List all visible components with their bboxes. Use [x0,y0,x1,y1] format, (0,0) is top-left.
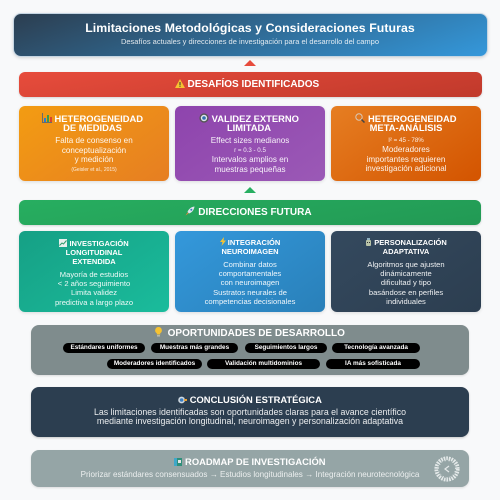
text: conceptualización [62,146,126,155]
text: Effect sizes medianos [211,136,289,145]
tags: IA más sofisticada [345,360,401,367]
heading [59,238,129,266]
heading: DE MEDIDAS [63,122,122,133]
heading: INVESTIGACIÓN [69,238,129,248]
text: competencias decisionales [205,297,295,306]
tags: Moderadores identificados [114,360,195,367]
tags: Seguimientos largos [255,344,317,351]
heading [199,113,299,133]
text [55,270,133,307]
heading: HETEROGENEIDAD [55,113,143,124]
heading [220,237,280,256]
panel: validez externo limitada: Intervalos amplios en [212,155,288,164]
text: dificultad y tipo [381,278,431,287]
heading [42,113,143,133]
text [367,260,445,306]
panel: heterogeneidad meta-análisis: Moderadores [382,145,430,154]
text: Las limitaciones identificadas son oportunidades claras para el avance científico [94,407,406,417]
panel: integración neuroimagen [175,231,325,312]
panel: investigación longitudinal extendida [19,231,169,312]
text: Sustratos neurales de [213,288,287,297]
heading: NEUROIMAGEN [221,247,279,256]
panel: heterogeneidad meta-análisis: investigación adicional [366,164,446,173]
text: predictiva a largo plazo [55,298,133,307]
panel: validez externo limitada: muestras pequeñas [214,165,286,174]
text: basándose en perfiles [369,288,443,297]
citation: (Geisler et al., 2015) [71,166,117,172]
subtitle: Desafíos actuales y direcciones de investigación para el desarrollo del campo [121,37,379,46]
heading: INTEGRACIÓN [228,238,280,247]
text: < 2 años seguimiento [58,279,130,288]
panel: validez externo limitada: r = 0.3 - 0.5 [234,147,266,154]
banner: direcciones futura: DIRECCIONES FUTURA [198,207,312,218]
heading [366,238,447,256]
heading: PERSONALIZACIÓN [374,238,447,247]
text [55,136,133,164]
text: Algoritmos que ajusten [367,260,445,269]
title: Limitaciones Metodológicas y Consideraciones Futuras [85,21,415,35]
text: dinámicamente [380,269,432,278]
panel: personalización adaptativa [331,231,481,312]
tags: Estándares uniformes [70,344,138,351]
text: con neuroimagen [221,278,279,287]
panel: heterogeneidad meta-análisis [331,106,481,181]
text: Limita validez [71,288,117,297]
heading: LIMITADA [227,122,271,133]
heading [355,113,457,133]
panel: roadmap de investigación [31,450,469,487]
title banner [12,12,488,56]
text: mediante investigación longitudinal, neuroimagen y personalización adaptativa [97,416,403,426]
heading: EXTENDIDA [72,257,116,266]
panel: conclusión estratégica [31,387,469,437]
heading: VALIDEZ EXTERNO [212,113,299,124]
panel: heterogeneidad meta-análisis: importantes requieren [367,155,445,164]
heading: LONGITUDINAL [66,248,122,257]
panel: oportunidades de desarrollo [31,325,469,375]
text: comportamentales [219,269,281,278]
tags: Validación multidominios [225,360,302,367]
tags: Tecnología avanzada [344,344,408,351]
banner: direcciones futura [19,200,481,225]
text: Priorizar estándares consensuados → Estudios longitudinales → Integración neurotecnológica [81,470,419,479]
heading: META-ANÁLISIS [370,122,442,133]
text: Falta de consenso en [55,136,133,145]
tags: Muestras más grandes [160,344,229,351]
text [94,407,406,426]
arrow: up green [244,187,256,193]
heading: CONCLUSIÓN ESTRATÉGICA [190,394,322,405]
text: individuales [386,297,426,306]
heading: OPORTUNIDADES DE DESARROLLO [168,328,345,339]
heading: HETEROGENEIDAD [368,113,457,124]
banner: desafíos identificados: DESAFÍOS IDENTIFICADOS [188,78,319,90]
text: Mayoría de estudios [60,270,128,279]
text: I² = 45 - 78% [388,137,424,144]
panel: heterogeneidad de medidas [19,106,169,181]
heading: ADAPTATIVA [383,247,429,256]
text: y medición [75,155,113,164]
icon: circular seal [434,456,460,482]
text [204,260,296,306]
arrow: up red [244,60,256,66]
tags [63,343,420,369]
panel: validez externo limitada [175,106,325,181]
banner: desafíos identificados [18,72,482,97]
heading: ROADMAP DE INVESTIGACIÓN [185,456,326,467]
text: Combinar datos [223,260,277,269]
